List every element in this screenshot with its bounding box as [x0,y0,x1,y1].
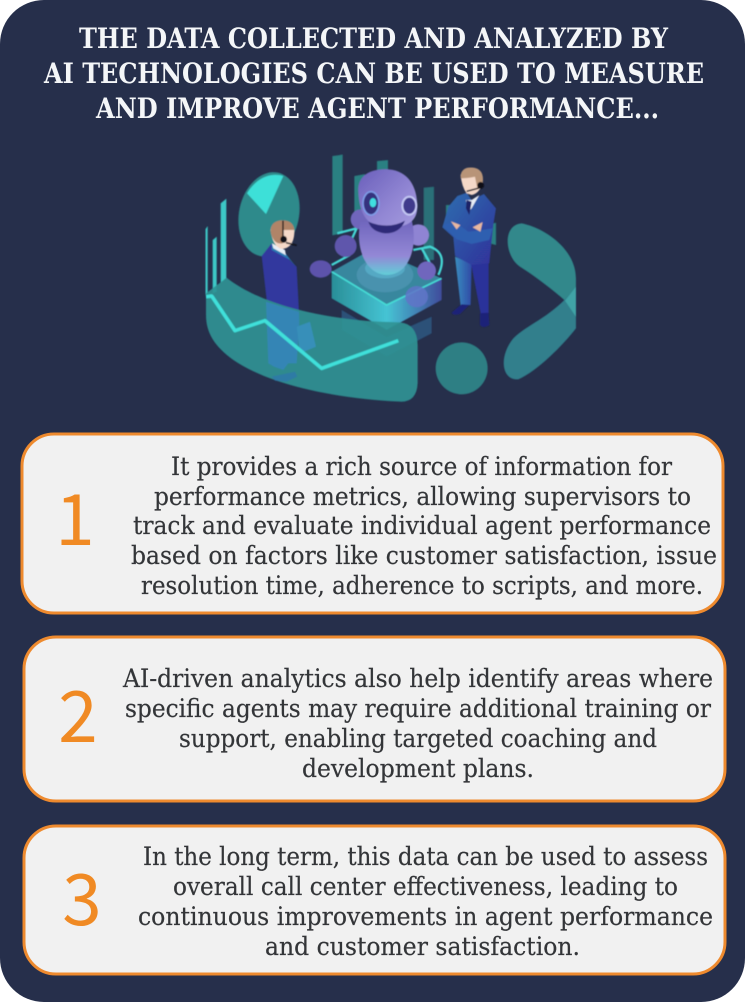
text 1: It provides a rich source of information for [171,452,672,481]
text 3: continuous improvements in agent performance [138,902,713,931]
text 2: support, enabling targeted coaching and [179,724,657,753]
panel 2 [24,637,725,801]
text 3 [138,842,713,961]
left agent legs and briefcase [266,302,316,382]
line chart [206,296,398,368]
title: AND IMPROVE AGENT PERFORMANCE... [95,92,659,125]
text 1: resolution time, adherence to scripts, and more. [141,571,703,600]
background bar chart [332,155,496,260]
left agent torso [262,220,299,312]
right agent [442,167,496,327]
teal circle [436,342,488,394]
text 3: In the long term, this data can be used to assess [143,842,708,871]
chevron shape [504,223,576,379]
text 1: based on factors like customer satisfaction, issue [131,541,717,570]
text 1: performance metrics, allowing supervisors to [154,482,691,511]
number 2: 2 [58,661,98,763]
text 3: and customer satisfaction. [265,932,580,961]
text 2: development plans. [302,754,534,783]
text 2: specific agents may require additional training or [125,694,711,723]
text 1 [131,452,717,600]
panel 3 [24,826,725,974]
panel 1 [22,434,723,613]
text 3: overall call center effectiveness, leading to [173,872,678,901]
robot platform [332,248,442,357]
number 1: 1 [55,464,95,566]
number 3: 3 [62,844,102,946]
text 2 [122,664,713,783]
teal band [206,278,418,402]
pie chart [231,166,307,262]
text 1: track and evaluate individual agent performance [133,511,711,540]
text 2: AI-driven analytics also help identify areas where [122,664,713,693]
robot [310,169,442,307]
title [43,22,704,125]
left bars [205,199,226,295]
illustration: robot and agents [205,155,576,402]
